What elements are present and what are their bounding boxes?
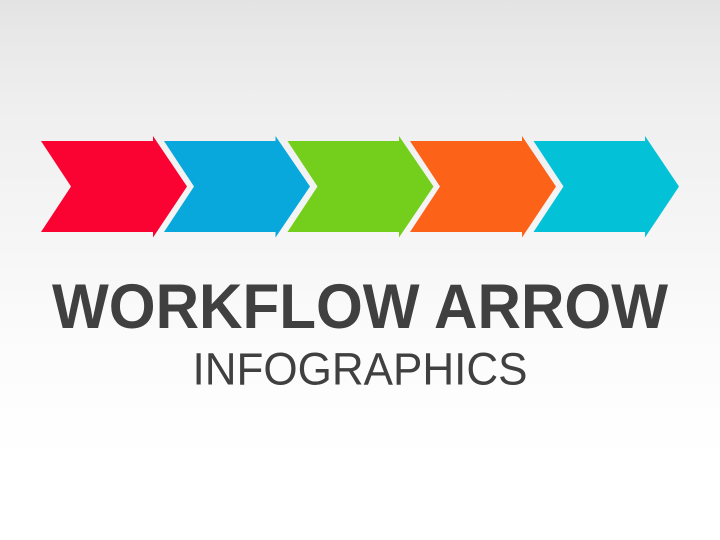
title: WORKFLOW ARROW bbox=[52, 272, 669, 342]
arrow 3: green bbox=[288, 136, 434, 238]
workflow arrows bbox=[41, 136, 679, 238]
subtitle: INFOGRAPHICS bbox=[192, 344, 528, 394]
arrow 1: red bbox=[41, 136, 187, 238]
arrow 5: teal bbox=[534, 136, 679, 238]
arrow 4: orange bbox=[410, 136, 556, 238]
arrow 2: blue bbox=[164, 136, 310, 238]
